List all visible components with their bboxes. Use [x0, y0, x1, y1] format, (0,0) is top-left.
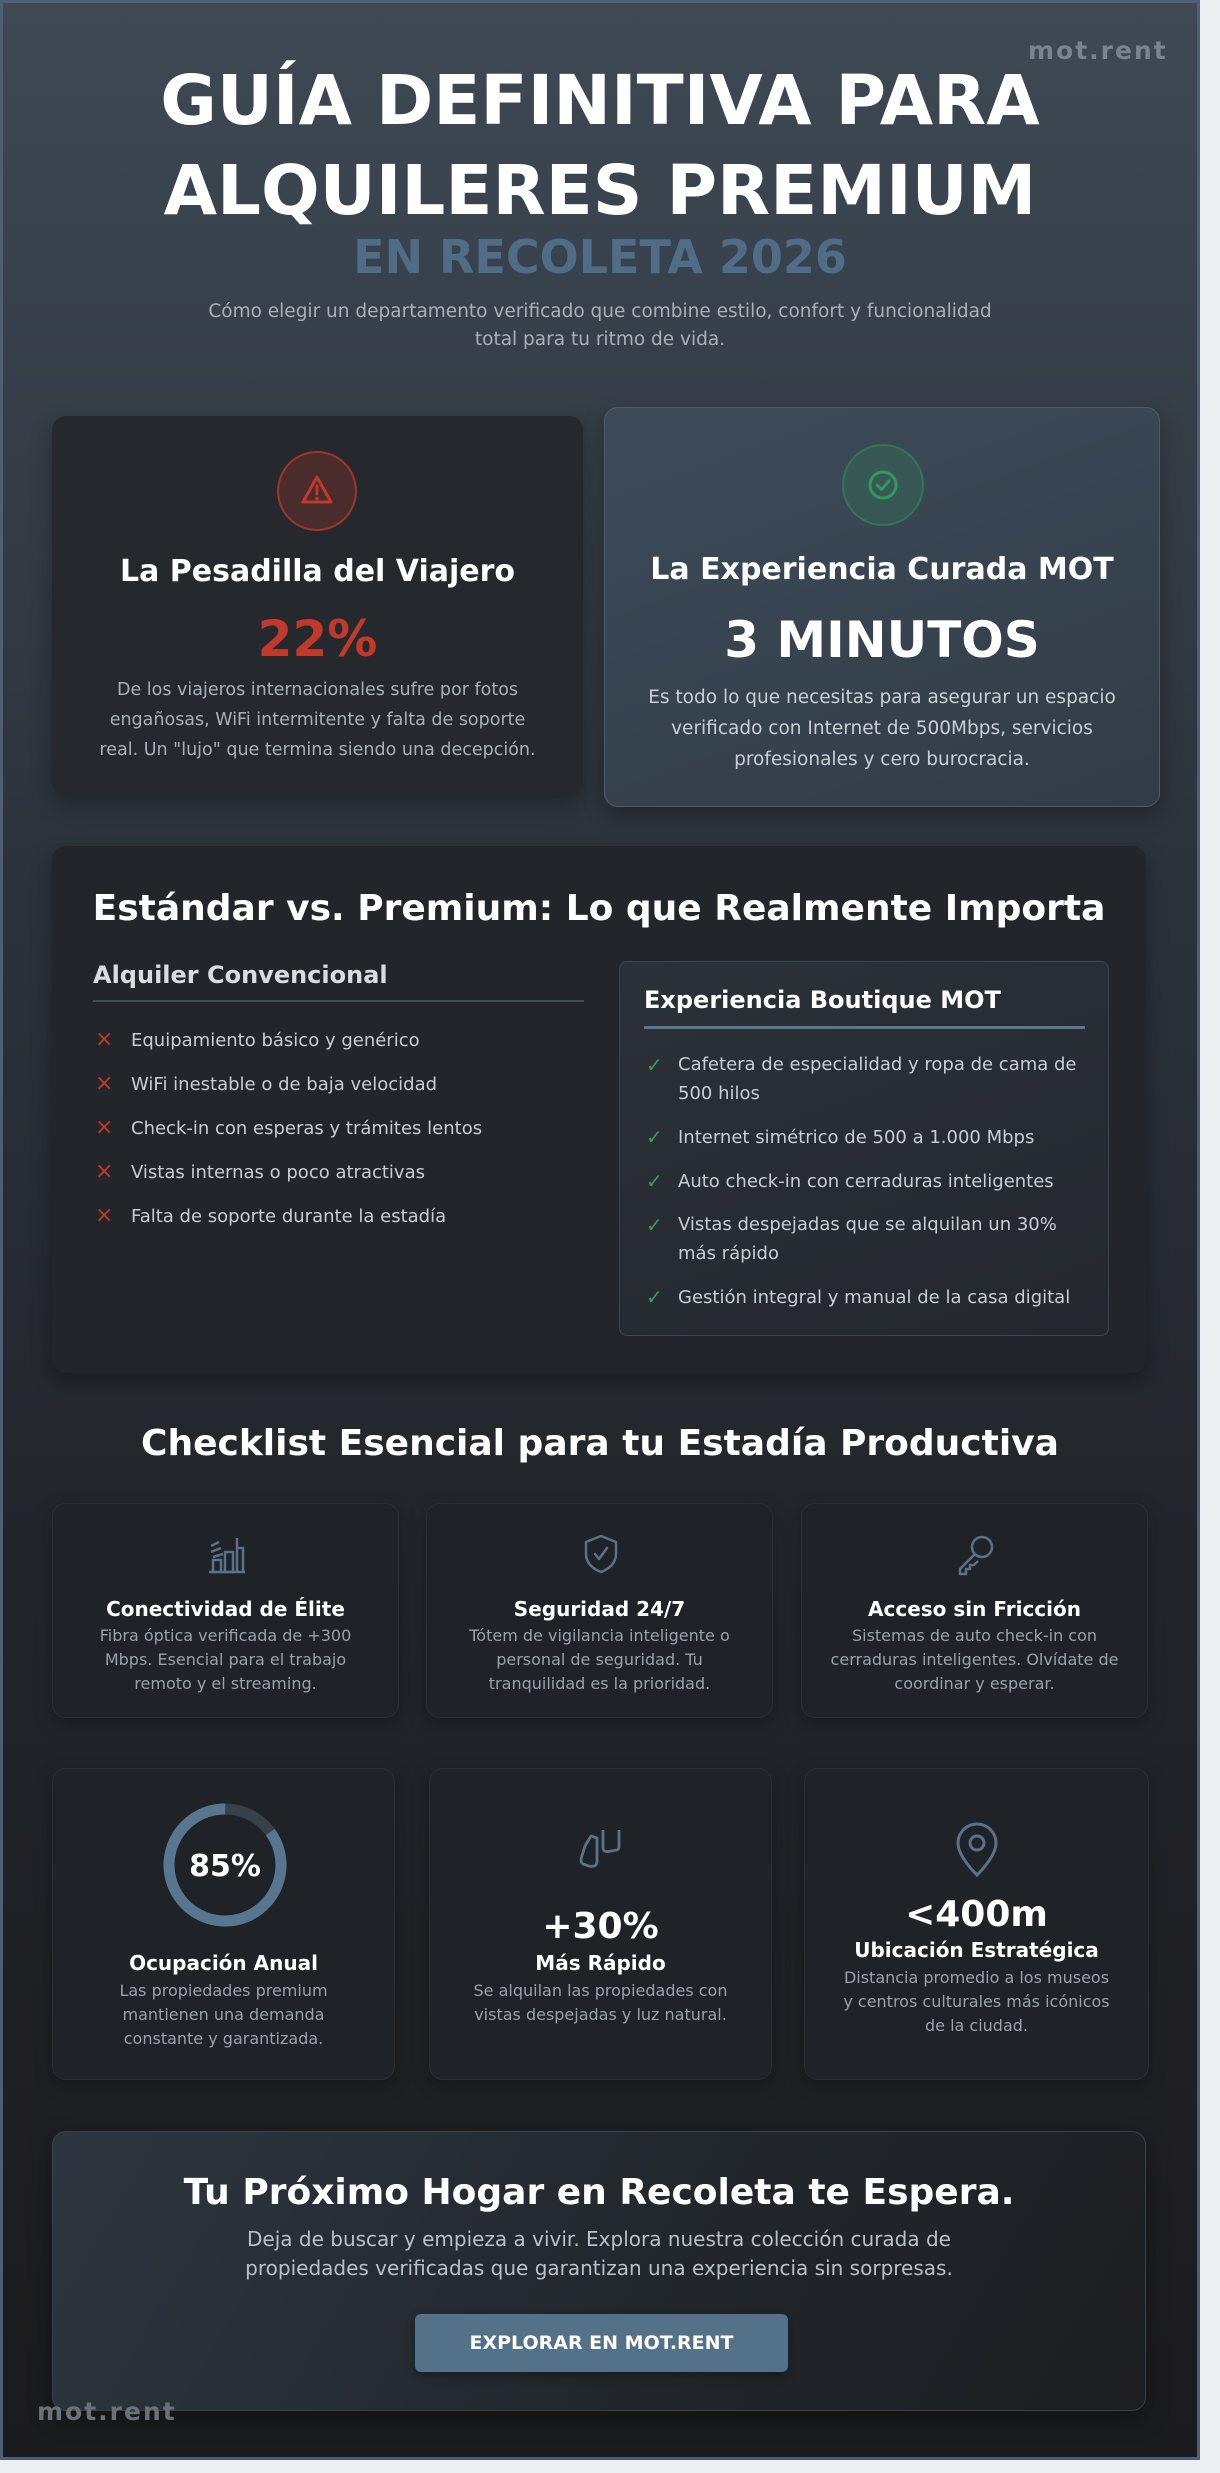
stat card: location: <400m — [905, 1894, 1048, 1935]
panel: problem — [52, 416, 583, 796]
donut chart 85% — [164, 1804, 286, 1926]
column: conventional: × — [95, 1027, 113, 1052]
column: boutique: ✓ — [646, 1213, 663, 1237]
card: security: Seguridad 24/7 — [514, 1597, 685, 1621]
card: access — [801, 1503, 1148, 1718]
icon: shield — [584, 1534, 618, 1574]
column: conventional: Vistas internas o poco atractivas — [131, 1162, 425, 1183]
card: connectivity — [52, 1503, 399, 1718]
title: ALQUILERES PREMIUM — [164, 151, 1036, 231]
column: boutique: Cafetera de especialidad y ropa de cama de 500 hilos — [678, 1054, 1077, 1104]
icon: key — [958, 1536, 994, 1576]
stat: 22% — [258, 610, 377, 668]
panel: call to action — [52, 2131, 1146, 2411]
icon: binoculars — [580, 1830, 620, 1868]
card: connectivity: Conectividad de Élite — [106, 1597, 345, 1621]
column: conventional: Equipamiento básico y genérico — [131, 1030, 420, 1051]
stat card: location: Distancia promedio a los museos y centros culturales más icónicos de la ciudad. — [843, 1968, 1110, 2035]
stat card: location: Ubicación Estratégica — [854, 1938, 1099, 1962]
text: De los viajeros internacionales sufre por fotos engañosas, WiFi intermitente y falta de soporte real. Un "lujo" que termina siendo una decepción. — [99, 680, 536, 760]
column: boutique: Internet simétrico de 500 a 1.000 Mbps — [678, 1127, 1034, 1148]
column: conventional: Falta de soporte durante la estadía — [131, 1206, 446, 1227]
column: boutique: ✓ — [646, 1053, 663, 1077]
column: boutique: Vistas despejadas que se alquilan un 30% más rápido — [678, 1214, 1057, 1264]
column: boutique: ✓ — [646, 1125, 663, 1149]
heading: La Experiencia Curada MOT — [650, 552, 1114, 587]
title — [160, 60, 1040, 231]
card: security — [426, 1503, 773, 1718]
title: GUÍA DEFINITIVA PARA — [160, 61, 1040, 141]
button — [415, 2314, 788, 2372]
heading: La Pesadilla del Viajero — [120, 554, 515, 589]
heading: Estándar vs. Premium: Lo que Realmente Importa — [93, 888, 1105, 929]
intro text — [208, 301, 992, 350]
icon: warning — [277, 451, 357, 531]
column: conventional: × — [95, 1203, 113, 1228]
card: access: Acceso sin Fricción — [868, 1597, 1081, 1621]
column: conventional: Check-in con esperas y trámites lentos — [131, 1118, 482, 1139]
column: conventional: WiFi inestable o de baja velocidad — [131, 1074, 437, 1095]
stat card: occupancy: Ocupación Anual — [129, 1951, 318, 1975]
column: conventional — [93, 961, 584, 1228]
stat card: faster — [429, 1768, 772, 2080]
column: conventional: × — [95, 1071, 113, 1096]
button: EXPLORAR EN MOT.RENT — [469, 2332, 734, 2354]
icon: signal — [209, 1538, 245, 1574]
intro text: Cómo elegir un departamento verificado que combine estilo, confort y funcionalidad — [208, 301, 992, 322]
stat card: faster: Se alquilan las propiedades con vistas despejadas y luz natural. — [474, 1981, 727, 2024]
stat card: occupancy: Las propiedades premium mantienen una demanda constante y garantizada. — [119, 1981, 328, 2048]
column: boutique: ✓ — [646, 1285, 663, 1309]
card: connectivity: Fibra óptica verificada de +300 Mbps. Esencial para el trabajo remoto y el streaming. — [100, 1626, 351, 1693]
brand bottom: mot.rent — [37, 2397, 177, 2426]
stat card: occupancy — [52, 1768, 395, 2080]
panel: solution — [604, 407, 1160, 807]
icon: check — [842, 444, 924, 526]
icon: map pin — [956, 1822, 998, 1877]
panel: comparison — [52, 846, 1146, 1373]
column: conventional: Alquiler Convencional — [93, 961, 388, 989]
column: boutique: Auto check-in con cerraduras inteligentes — [678, 1171, 1054, 1192]
subtitle: EN RECOLETA 2026 — [353, 230, 847, 284]
text: Deja de buscar y empieza a vivir. Explora nuestra colección curada de propiedades verificadas que garantizan una experiencia sin sorpresas. — [245, 2227, 953, 2280]
brand top: mot.rent — [1028, 36, 1168, 65]
card: access: Sistemas de auto check-in con cerraduras inteligentes. Olvídate de coordinar y esperar. — [831, 1626, 1118, 1693]
intro text: total para tu ritmo de vida. — [475, 329, 725, 350]
stat: 3 MINUTOS — [724, 611, 1040, 669]
text: Es todo lo que necesitas para asegurar un espacio verificado con Internet de 500Mbps, servicios profesionales y cero burocracia. — [648, 687, 1116, 770]
checklist heading: Checklist Esencial para tu Estadía Productiva — [141, 1423, 1059, 1464]
column: conventional: × — [95, 1159, 113, 1184]
column: boutique: Gestión integral y manual de la casa digital — [678, 1287, 1070, 1308]
column: boutique — [619, 961, 1109, 1336]
heading: Tu Próximo Hogar en Recoleta te Espera. — [184, 2172, 1014, 2213]
stat card: faster: +30% — [542, 1906, 659, 1947]
stat card: location — [804, 1768, 1149, 2080]
stat card: faster: Más Rápido — [535, 1951, 666, 1975]
card: security: Tótem de vigilancia inteligente o personal de seguridad. Tu tranquilidad es la prioridad. — [469, 1626, 730, 1693]
column: boutique: ✓ — [646, 1169, 663, 1193]
donut chart 85%: 85% — [189, 1849, 261, 1884]
column: boutique: Experiencia Boutique MOT — [644, 986, 1001, 1014]
column: conventional: × — [95, 1115, 113, 1140]
